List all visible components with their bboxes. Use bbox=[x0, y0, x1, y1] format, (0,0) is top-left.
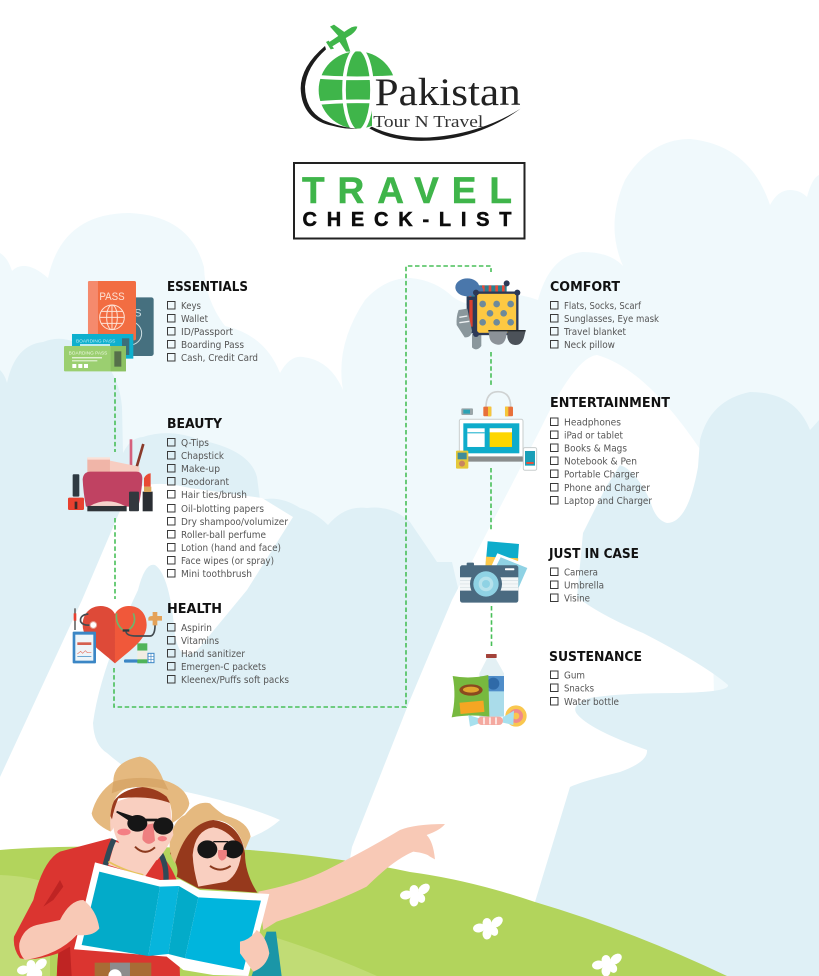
icon: plane bbox=[326, 25, 357, 52]
checklist: health: Emergen-C packets bbox=[181, 662, 266, 673]
illustration: couple reading a map bbox=[14, 757, 445, 976]
checklist: comfort bbox=[550, 279, 659, 351]
camera bbox=[95, 963, 151, 976]
checklist: entertainment: Books & Mags bbox=[564, 444, 627, 454]
checklist: beauty: Q-Tips bbox=[181, 438, 209, 449]
title: check-list: CHECK-LIST bbox=[302, 209, 512, 231]
icon: camera and photos bbox=[460, 541, 533, 603]
logo tagline: Tour N Travel bbox=[373, 112, 484, 131]
icon: entertainment devices bbox=[456, 392, 537, 470]
checklist: entertainment bbox=[550, 395, 671, 507]
checklist: health: HEALTH bbox=[167, 601, 222, 617]
checklist: just in case: JUST IN CASE bbox=[548, 546, 639, 562]
checklist: essentials: Wallet bbox=[181, 314, 208, 325]
checklist: beauty: Lotion (hand and face) bbox=[181, 543, 281, 554]
checklist: health: Vitamins bbox=[181, 636, 219, 647]
checklist: sustenance: Snacks bbox=[564, 684, 594, 694]
logo wordmark: Pakistan bbox=[375, 70, 521, 114]
icon: makeup bag bbox=[68, 439, 153, 511]
checklist: essentials: Cash, Credit Card bbox=[181, 353, 258, 364]
checklist: beauty: Deodorant bbox=[181, 477, 229, 488]
checklist: sustenance: Water bottle bbox=[564, 697, 619, 708]
checklist: beauty: Dry shampoo/volumizer bbox=[181, 517, 289, 528]
woman's teal top bbox=[252, 932, 282, 976]
checklist: health: Aspirin bbox=[181, 623, 212, 634]
checklist: beauty bbox=[167, 416, 289, 580]
woman's sunglasses bbox=[197, 840, 243, 858]
checklist: entertainment: Notebook & Pen bbox=[564, 456, 637, 468]
checklist: entertainment: Portable Charger bbox=[564, 470, 640, 480]
checklist: sustenance: Gum bbox=[564, 670, 585, 682]
title box bbox=[294, 163, 524, 238]
logo: Pakistan Tour N Travel bbox=[301, 25, 521, 141]
checklist: just in case bbox=[548, 546, 639, 604]
man's neck and straps bbox=[108, 842, 160, 877]
woman's hair bbox=[170, 820, 257, 893]
checklist: entertainment: Phone and Charger bbox=[564, 483, 651, 494]
checklist: essentials: ID/Passport bbox=[181, 327, 233, 338]
checklist: comfort: Sunglasses, Eye mask bbox=[564, 314, 659, 325]
checklist: beauty: BEAUTY bbox=[167, 416, 222, 432]
checklist: health: Hand sanitizer bbox=[181, 649, 246, 660]
man's arm and hand bbox=[19, 900, 99, 960]
checklist: essentials bbox=[167, 279, 258, 364]
checklist: health bbox=[167, 601, 289, 686]
icon: heart and health items bbox=[73, 606, 162, 663]
checklist: entertainment: iPad or tablet bbox=[564, 430, 623, 442]
checklist: essentials: Boarding Pass bbox=[181, 340, 244, 351]
icon: passports and boarding passes bbox=[64, 281, 154, 371]
woman's hat bbox=[170, 803, 251, 863]
flower decorations bbox=[16, 881, 624, 976]
checklist: health: Kleenex/Puffs soft packs bbox=[181, 675, 289, 686]
woman's hand bbox=[240, 930, 269, 972]
woman's nose and smile bbox=[218, 850, 227, 861]
map bbox=[74, 862, 269, 976]
checklist: comfort: Flats, Socks, Scarf bbox=[564, 301, 641, 312]
icon: passports and boarding passes: S bbox=[134, 308, 141, 320]
woman's pointing arm bbox=[258, 824, 445, 930]
checklist: entertainment: Laptop and Charger bbox=[564, 496, 653, 507]
woman's face bbox=[193, 827, 242, 887]
dashed connector route bbox=[114, 266, 492, 707]
checklist: essentials: Keys bbox=[181, 301, 201, 312]
man's hat bbox=[92, 757, 189, 832]
checklist: just in case: Camera bbox=[564, 568, 598, 578]
icon: passports and boarding passes: BOARDING PASS bbox=[69, 351, 107, 356]
icon: passports and boarding passes: PASS bbox=[99, 291, 125, 303]
man's hair bbox=[108, 787, 171, 819]
checklist: beauty: Oil-blotting papers bbox=[181, 504, 264, 515]
checklist: comfort: COMFORT bbox=[550, 279, 621, 295]
man's smile bbox=[135, 847, 155, 852]
icon: globe bbox=[315, 49, 402, 131]
icon: passports and boarding passes: BOARDING PASS bbox=[76, 338, 115, 343]
checklist: just in case: Visine bbox=[564, 594, 590, 604]
checklist: beauty: Hair ties/brush bbox=[181, 490, 247, 501]
checklist: comfort: Neck pillow bbox=[564, 340, 615, 351]
checklist: beauty: Roller-ball perfume bbox=[181, 530, 266, 541]
checklist: sustenance bbox=[549, 649, 642, 708]
checklist: beauty: Face wipes (or spray) bbox=[181, 556, 274, 567]
checklist: sustenance: SUSTENANCE bbox=[549, 649, 642, 665]
checklist: entertainment: Headphones bbox=[564, 418, 621, 428]
man's shirt bbox=[14, 838, 180, 976]
icon: water bottle, chips and candy bbox=[452, 654, 527, 727]
checklist: beauty: Make-up bbox=[181, 464, 220, 475]
icon: comfort pillow, socks and sunglasses bbox=[455, 278, 526, 349]
checklist: comfort: Travel blanket bbox=[563, 327, 626, 338]
checklist: beauty: Mini toothbrush bbox=[181, 569, 252, 580]
swoosh bbox=[301, 46, 357, 129]
checklist: essentials: ESSENTIALS bbox=[167, 279, 248, 295]
man's sunglasses bbox=[117, 812, 173, 835]
man's cheeks and nose bbox=[117, 829, 131, 835]
man's face bbox=[113, 797, 173, 861]
checklist: beauty: Chapstick bbox=[181, 451, 224, 462]
checklist: just in case: Umbrella bbox=[564, 580, 604, 592]
swoosh lower bbox=[369, 109, 521, 141]
checklist: entertainment: ENTERTAINMENT bbox=[550, 395, 671, 411]
title: travel: TRAVEL bbox=[302, 170, 512, 211]
